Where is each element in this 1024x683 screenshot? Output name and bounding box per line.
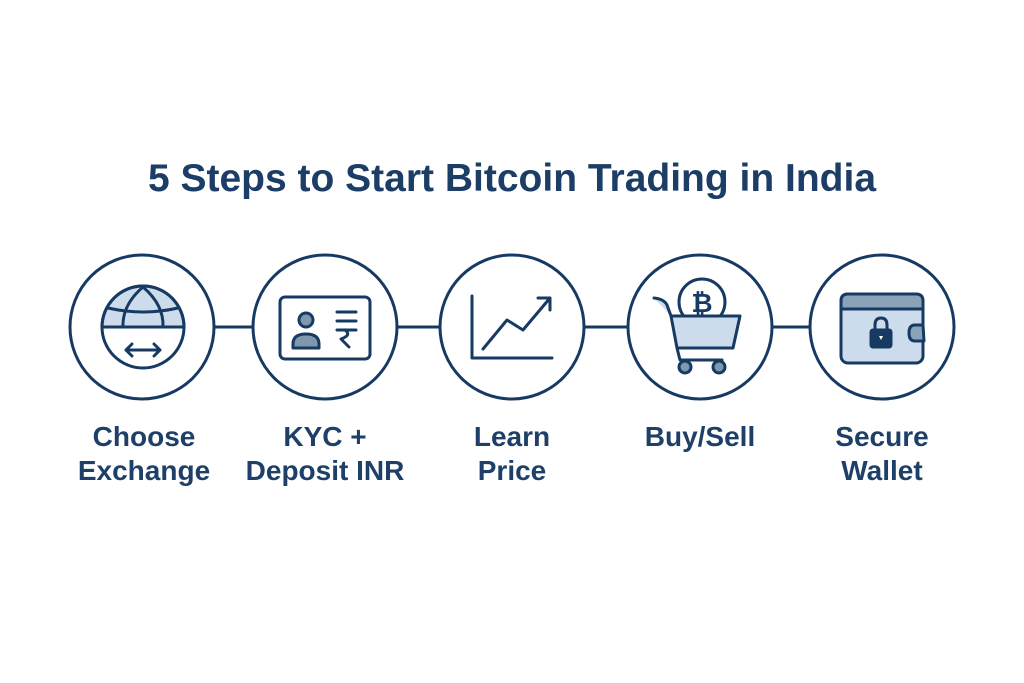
label: Learn Price: Price xyxy=(478,455,546,486)
label: Learn Price: Learn xyxy=(474,421,550,452)
label: Secure Wallet: Secure xyxy=(835,421,929,452)
icon: ID card xyxy=(280,297,370,359)
label: KYC + Deposit INR xyxy=(246,421,404,486)
label: Choose Exchange: Choose xyxy=(93,421,195,452)
label: Choose Exchange: Exchange xyxy=(78,455,210,486)
label: Secure Wallet xyxy=(835,421,929,486)
label: KYC + Deposit INR: KYC + xyxy=(283,421,367,452)
label: Buy/Sell: Buy/Sell xyxy=(645,421,755,452)
label: Secure Wallet: Wallet xyxy=(841,455,923,486)
label: Choose Exchange xyxy=(78,421,210,486)
title: 5 Steps to Start Bitcoin Trading in India xyxy=(148,157,876,200)
label: Learn Price xyxy=(474,421,550,486)
icon: cart with bitcoin: ₿ xyxy=(691,288,713,318)
connectors xyxy=(214,326,810,328)
icon: wallet with lock xyxy=(841,294,924,363)
icon: cart with bitcoin xyxy=(654,279,740,373)
label: KYC + Deposit INR: Deposit INR xyxy=(246,455,404,486)
icon: globe xyxy=(102,286,184,368)
icon: chart xyxy=(472,296,552,358)
circles xyxy=(70,255,954,399)
